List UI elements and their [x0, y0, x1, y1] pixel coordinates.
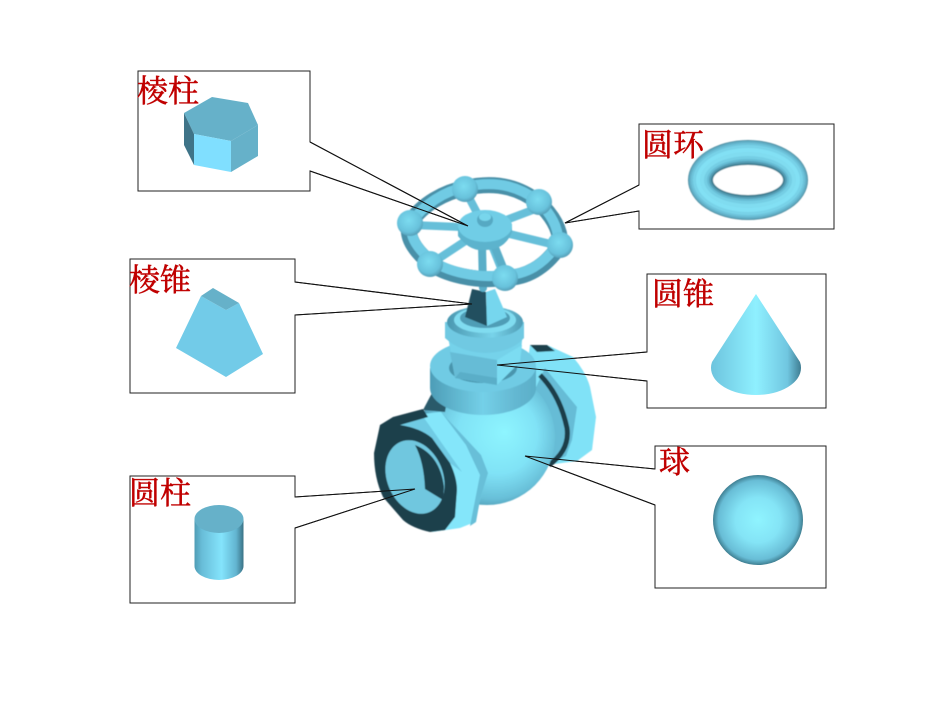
icon: cone — [711, 294, 801, 395]
rim balls — [397, 176, 573, 291]
front hex nut — [374, 409, 488, 532]
label: 棱柱: 棱柱 — [137, 74, 199, 109]
nut end face — [374, 409, 457, 532]
neck flange — [430, 340, 536, 415]
valve illustration — [374, 176, 596, 532]
panel: 圆环 callout — [565, 124, 834, 229]
icon: pyramid frustum — [176, 288, 263, 377]
icon: cylinder — [194, 505, 244, 580]
icon: hexagonal prism — [184, 97, 258, 172]
label: 球: 球 — [659, 445, 690, 480]
label: 棱锥: 棱锥 — [129, 263, 191, 298]
spokes — [412, 190, 555, 288]
pointer lines over valve — [295, 142, 655, 528]
panel: 棱柱 callout — [137, 71, 468, 226]
panel: 圆柱 callout — [129, 476, 415, 603]
icon: torus — [688, 140, 808, 220]
upper collar — [445, 306, 524, 353]
sphere body — [419, 369, 555, 505]
label: 圆锥: 圆锥 — [652, 277, 714, 312]
icon: sphere — [713, 475, 803, 565]
panel: 棱锥 callout — [129, 259, 472, 393]
neck shadow — [423, 393, 448, 412]
wheel rim — [409, 184, 560, 279]
nut bore — [375, 431, 455, 523]
panel: 球 callout — [525, 445, 826, 588]
label: 圆环: 圆环 — [642, 128, 705, 163]
handwheel — [397, 176, 573, 291]
hub — [458, 210, 512, 250]
back flange — [520, 345, 596, 465]
stem pyramid — [465, 289, 507, 326]
bore thread shading — [415, 445, 444, 500]
hex nut — [447, 330, 523, 385]
panel: 圆锥 callout — [497, 274, 826, 408]
label: 圆柱: 圆柱 — [129, 476, 191, 511]
